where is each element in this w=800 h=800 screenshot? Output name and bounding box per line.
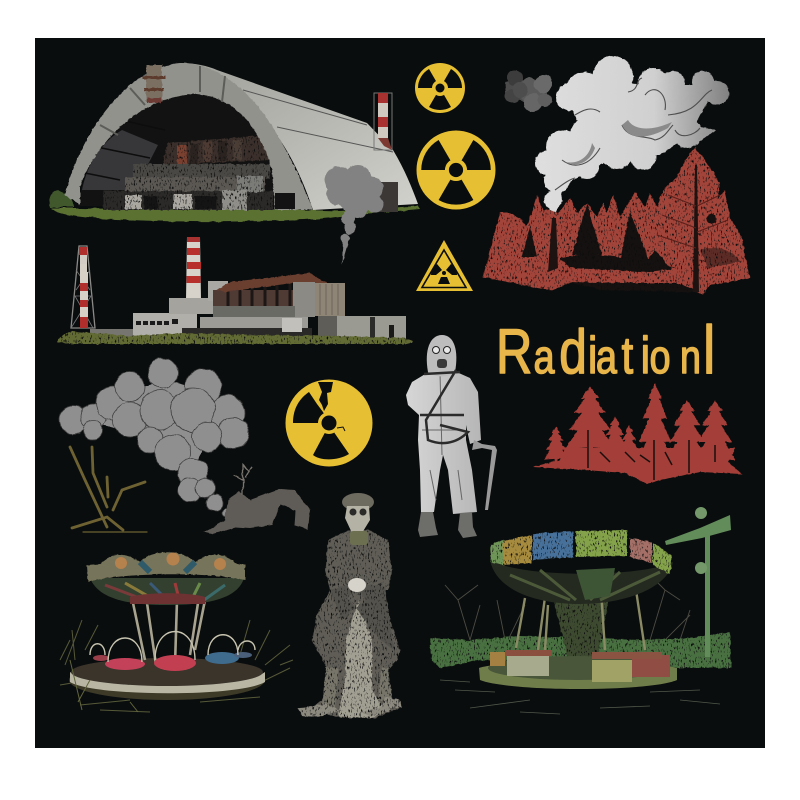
small annex: [377, 182, 398, 212]
hat: [342, 493, 374, 511]
right annex: [318, 316, 406, 341]
carousel seats: [90, 632, 255, 671]
title: n: [680, 331, 701, 384]
dead tree: [70, 447, 147, 532]
inner red band: [130, 593, 205, 604]
dark undergrowth: [522, 203, 740, 292]
main hall: [213, 290, 293, 310]
reactor building: [103, 135, 273, 210]
crossed sleeves: [330, 582, 394, 650]
canopy underside: [90, 578, 244, 605]
illustration: power plant: [58, 237, 413, 344]
roof: [180, 63, 418, 210]
title: a: [596, 331, 617, 384]
illustration: gas-mask cloaked figure: [297, 493, 402, 718]
canopy underside: [490, 560, 673, 604]
glove and hook: [472, 440, 497, 510]
hood and gas mask: [427, 335, 456, 376]
title: t: [622, 326, 633, 384]
platform: [69, 658, 265, 700]
coat: [297, 530, 402, 718]
title: i: [588, 326, 597, 384]
illustration: left carousel: [60, 552, 293, 712]
title: i: [641, 326, 650, 384]
chimney behind arch: [374, 93, 392, 150]
title: o: [650, 331, 671, 384]
title: a: [534, 331, 555, 384]
weeds strip: [58, 332, 413, 344]
arch interior: [78, 94, 274, 208]
ground under arch: [50, 206, 420, 222]
signal post: [665, 507, 731, 657]
interior ribbed wall: [82, 130, 158, 190]
illustration: smoke with tree: [59, 358, 310, 534]
dark trunks and undergrowth: [588, 430, 715, 480]
grass band: [430, 632, 731, 668]
legs: [516, 575, 645, 650]
smoke column: [324, 165, 384, 264]
door in band: [275, 193, 295, 209]
icon: radiation symbol large: [416, 130, 496, 210]
icon: radiation warning triangle: [416, 240, 473, 291]
illustration: containment arch: [49, 63, 420, 264]
bushes: [49, 190, 73, 207]
grey smoke cloud: [59, 358, 249, 517]
poles: [133, 600, 205, 665]
icon: cracked radiation symbol: [286, 380, 372, 466]
branch lines: [657, 195, 728, 248]
illustration: red forest lower: [533, 383, 742, 484]
twisted creature root: [204, 465, 310, 534]
boots: [418, 512, 477, 538]
water streaks: [440, 680, 720, 714]
illustration: large white smoke cloud: [535, 56, 729, 224]
grass tufts: [60, 620, 293, 712]
illustration: right carousel with signal post: [430, 507, 731, 714]
tree trunks: [548, 165, 699, 292]
illustration: red forest upper: [483, 148, 750, 295]
illustration: hazmat suit figure: [406, 335, 497, 538]
central column: [553, 595, 610, 660]
dry branches: [445, 580, 690, 640]
suit: [406, 370, 481, 514]
hands holding skull: [348, 578, 366, 592]
icon: radiation symbol small: [415, 63, 465, 113]
title: d: [559, 317, 587, 386]
striped chimney: [186, 237, 201, 300]
title: R: [496, 317, 532, 387]
harness: [420, 370, 468, 443]
crane on arch: [143, 65, 165, 103]
lattice tower: [71, 246, 95, 328]
front band of arch: [65, 63, 313, 210]
title: l: [703, 312, 715, 388]
front weeds: [70, 660, 138, 712]
boot wraps: [322, 668, 392, 708]
feet: [297, 697, 402, 717]
undergrowth and forest floor: [533, 448, 742, 484]
mid blocks: [169, 298, 213, 314]
pale robe: [338, 600, 385, 718]
canopy scalloped rim: [87, 552, 245, 582]
mask: [345, 506, 370, 545]
galleries: [213, 306, 295, 317]
canopy panels: [490, 530, 672, 574]
low left wing: [90, 329, 135, 340]
illustration: small grey cloud: [505, 70, 552, 112]
platform: [479, 656, 677, 689]
seat boxes: [490, 650, 670, 682]
